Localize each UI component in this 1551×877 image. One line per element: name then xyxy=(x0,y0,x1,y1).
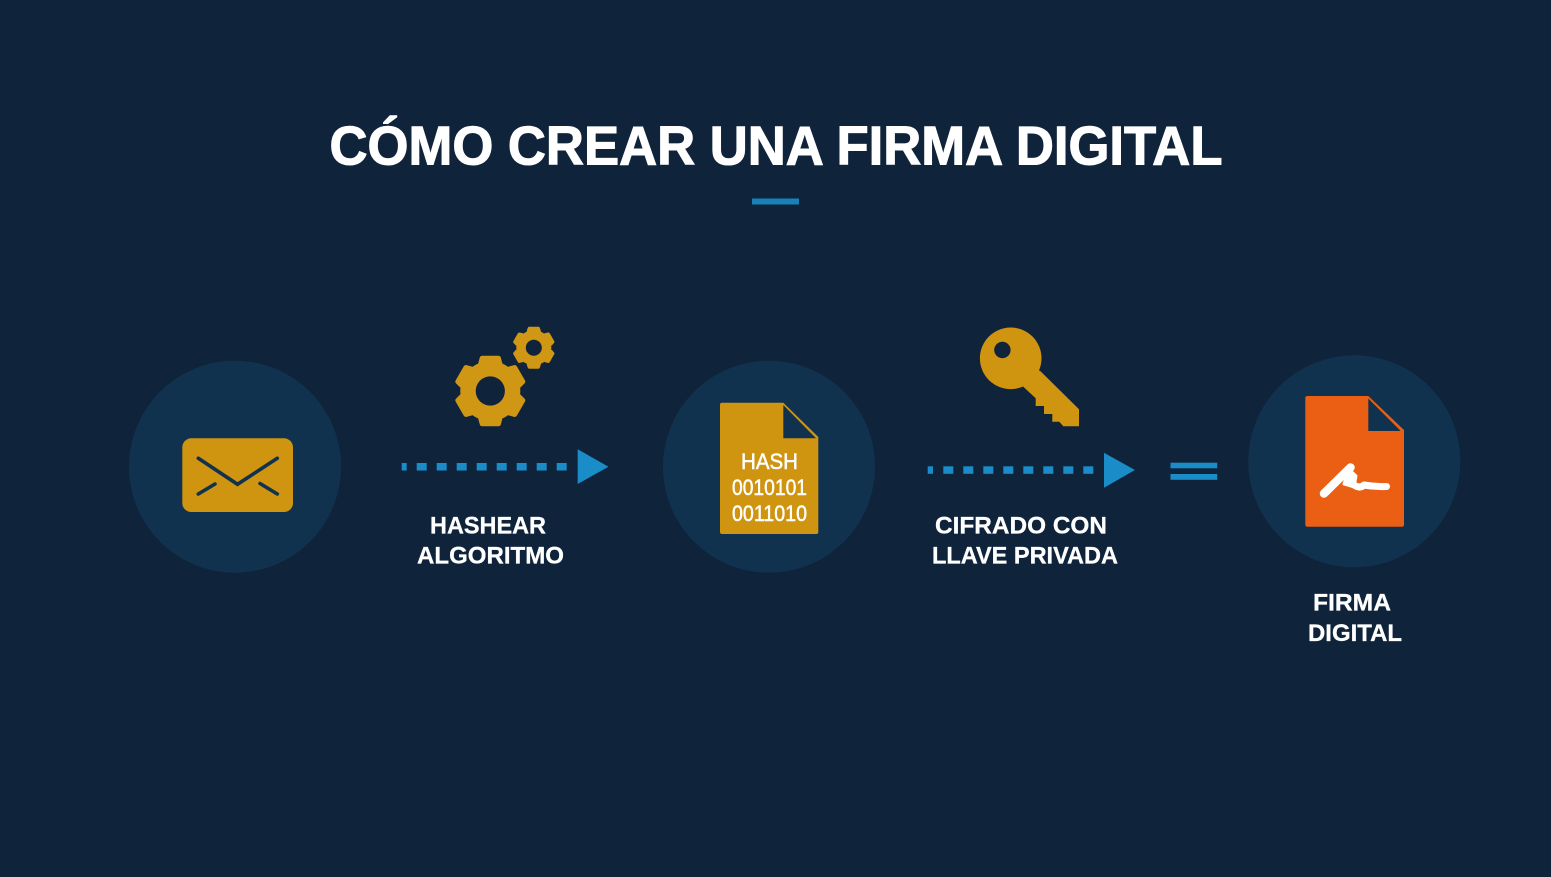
icon: gears xyxy=(454,327,555,426)
label: hashear algoritmo xyxy=(417,512,564,570)
label: cifrado con llave privada: CIFRADO CON xyxy=(935,512,1107,540)
title: CÓMO CREAR UNA FIRMA DIGITAL xyxy=(330,114,1222,176)
document fold xyxy=(783,405,816,438)
document fold xyxy=(1368,398,1401,431)
circle background xyxy=(129,361,341,573)
large gear xyxy=(454,356,527,426)
step 2: hash document xyxy=(663,361,875,573)
label: firma digital: DIGITAL xyxy=(1308,620,1402,647)
label: firma digital xyxy=(1308,590,1402,647)
icon: envelope xyxy=(182,438,293,512)
signature xyxy=(1324,468,1386,494)
small gear xyxy=(512,327,555,369)
icon: document xyxy=(720,403,818,534)
icon: key xyxy=(980,328,1079,426)
circle background xyxy=(663,361,875,573)
label: cifrado con llave privada: LLAVE PRIVADA xyxy=(932,542,1118,570)
hash text xyxy=(732,449,807,526)
circle background xyxy=(1248,355,1460,567)
label: cifrado con llave privada xyxy=(932,512,1118,570)
icon: orange document xyxy=(1305,396,1404,527)
icon: equals sign xyxy=(1170,463,1217,480)
hash text: 0011010 xyxy=(732,501,807,526)
label: hashear algoritmo: HASHEAR xyxy=(430,512,546,540)
step 3: signed document xyxy=(1248,355,1460,567)
label: firma digital: FIRMA xyxy=(1313,590,1391,617)
arrow: hashing xyxy=(402,449,608,484)
step 1: message envelope xyxy=(129,361,341,573)
arrow: encryption xyxy=(928,453,1135,488)
title accent bar xyxy=(752,198,799,204)
label: hashear algoritmo: ALGORITMO xyxy=(417,542,564,570)
hash text: HASH xyxy=(741,449,798,474)
hash text: 0010101 xyxy=(732,475,807,500)
